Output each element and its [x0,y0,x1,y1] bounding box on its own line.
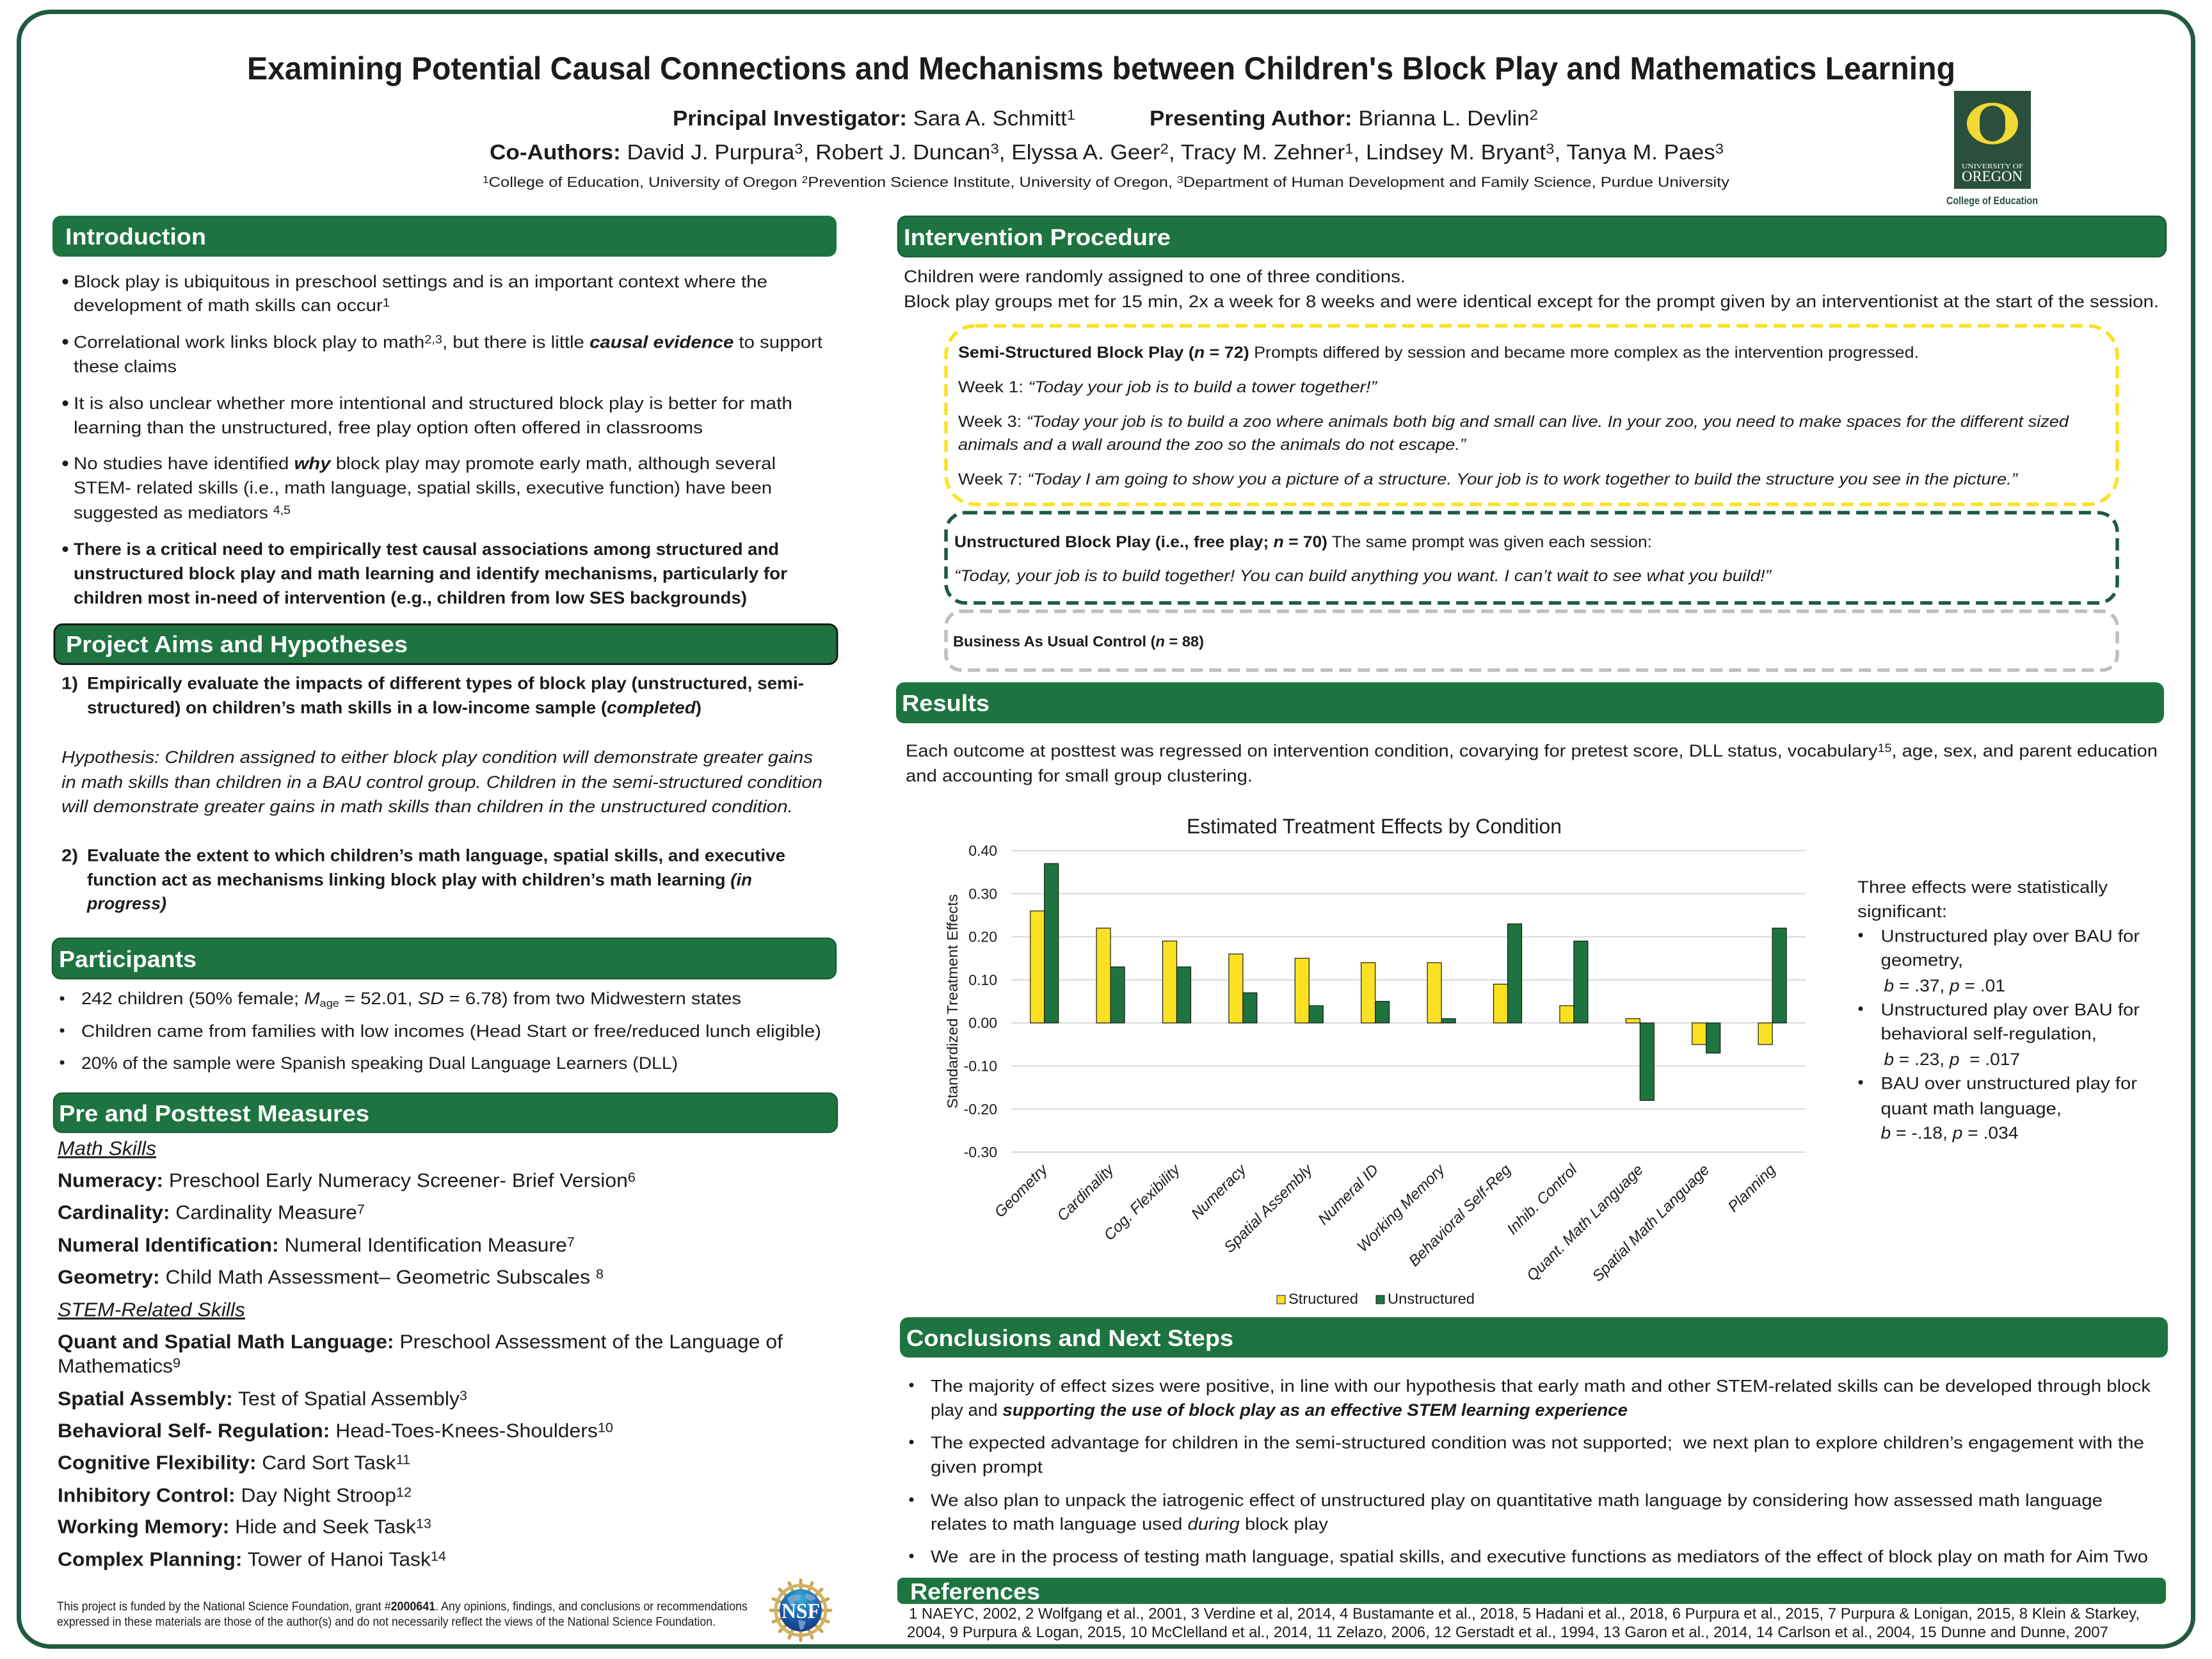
principal investigator: Principal Investigator: Sara A. Schmitt 1 [673,106,1075,130]
text block: significant effects: quant math language, [1880,1099,2062,1118]
text block: STEM-related skills measures: Working Memory: Hide and Seek Task 13 [58,1516,431,1537]
heading: introduction: Introduction [65,223,206,250]
panel: intervention procedure [898,216,2166,670]
text block: introduction bullets: development of math skills can occur 1 [74,296,390,315]
text block: introduction bullets: unstructured block play and math learning and identify mechanisms, particularly for [74,564,787,583]
text block: procedure summary: Children were randomly assigned to one of three conditions. [904,267,1406,286]
text block: participants bullets [60,989,821,1073]
y axis tick labels: 0.00 [968,1014,997,1031]
heading: results: Results [902,690,990,716]
panel: results [896,682,2164,1307]
text block: introduction bullets: Block play is ubiquitous in preschool settings and is an important context where the [74,272,767,291]
chart title: Estimated Treatment Effects by Condition [1187,815,1562,838]
text block: math skills measures: Numeral Identification: Numeral Identification Measure 7 [58,1234,575,1256]
funding statement: This project is funded by the National Science Foundation, grant #2000641. Any opinions, findings, and conclusions or recommendations [57,1600,748,1614]
text block: introduction bullets: It is also unclear whether more intentional and structured block play is better for math [74,394,792,413]
logo: University of Oregon: UNIVERSITY OF [1962,163,2023,170]
callout: semi-structured block play: Week 7: “Today I am going to show you a picture of a structure. Your job is to work together to build the structure you see in the picture.” [958,470,2019,488]
heading: project aims: Project Aims and Hypotheses [66,631,408,657]
text block: aim 2: progress) [86,894,166,913]
heading: introduction [52,216,837,257]
text block: aim 1: Empirically evaluate the impacts of different types of block play (unstructured, semi- [87,673,804,693]
text block: significant effects: b = .37, p = .01 [1884,976,2005,995]
text block: conclusions bullets: The expected advantage for children in the semi-structured condition was not supported; we next plan to explore children’s engagement with the [931,1433,2144,1452]
icon: NSF logo: NSF [781,1599,820,1623]
logo: University of Oregon: College of Education [1946,195,2038,207]
x axis category labels: Numeracy [1188,1160,1251,1223]
text block: STEM-related skills measures: Quant and Spatial Math Language: Preschool Assessment of the Language of [58,1330,783,1353]
bars: structured [1030,911,1772,1045]
x axis category labels: Inhib. Control [1503,1161,1581,1238]
text block: significant effects: b = .23, p = .017 [1884,1050,2020,1069]
text block: significant effects: significant: [1857,902,1947,921]
text block: significant effects: behavioral self-regulation, [1880,1024,2097,1043]
heading: project aims [54,625,837,664]
text block: STEM-related skills measures [58,1298,783,1571]
bars: unstructured [1045,863,1786,1100]
y axis tick labels: 0.40 [968,842,997,859]
text block: STEM-related skills measures: Spatial Assembly: Test of Spatial Assembly 3 [58,1388,467,1409]
affiliations: 1College of Education, University of Oregon 2Prevention Science Institute, University of Oregon, 3Department of Human Development and Family Science, Purdue University [483,174,1730,190]
callout: semi-structured block play: Week 3: “Today your job is to build a zoo where animals both big and small can live. In your zoo, you need to make spaces for the different sized [958,413,2069,431]
text block: significant effects: b = -.18, p = .034 [1880,1123,2019,1142]
legend: Structured [1288,1290,1358,1307]
x axis category labels: Spatial Math Language [1589,1161,1713,1285]
text block: introduction bullets: Correlational work links block play to math 2,3, but there is little causal evidence to support [74,333,823,352]
text block: participants bullets: 242 children (50% female; Mage = 52.01, SD = 6.78) from two Midwestern states [81,989,741,1009]
x axis category labels: Behavioral Self-Reg [1406,1161,1514,1270]
callout: unstructured block play: “Today, your job is to build together! You can build anything you want. I can’t wait to see what you build!” [954,567,1772,585]
text block: conclusions bullets: play and supporting the use of block play as an effective STEM learning experience [931,1400,1628,1420]
text block: introduction bullets [63,272,823,607]
heading: participants [52,938,836,979]
logo: University of Oregon: OREGON [1962,168,2023,184]
text block: STEM-related skills measures: Mathematics9 [58,1354,180,1377]
panel: conclusions and next steps [900,1317,2168,1566]
x axis category labels: Numeral ID [1315,1161,1382,1228]
text block: significant effects: Unstructured play over BAU for [1880,927,2140,946]
text block: aim 2: 2) [61,846,78,865]
text block: introduction bullets: suggested as mediators 4,5 [74,503,291,522]
y axis tick labels: -0.10 [964,1057,997,1074]
text block: STEM-related skills measures: Complex Planning: Tower of Hanoi Task 14 [58,1548,446,1571]
text block: references list [907,1605,2140,1641]
text block: introduction bullets: No studies have identified why block play may promote early math, although several [74,454,776,473]
title: Examining Potential Causal Connections and Mechanisms between Children's Block Play and Mathematics Learning [247,51,1955,86]
y axis tick labels: 0.30 [968,885,997,902]
text block: STEM-related skills measures: Cognitive Flexibility: Card Sort Task11 [58,1452,410,1473]
text block: introduction bullets: these claims [74,357,177,376]
callout: unstructured block play [946,513,2117,603]
text block: introduction bullets: children most in-need of intervention (e.g., children from low SES backgrounds) [74,588,747,607]
text block: aim 2 [61,846,785,913]
text block: aim 2: function act as mechanisms linking block play with children’s math learning (in [87,870,752,890]
callout: business as usual control [946,611,2117,670]
text block: references list: 2004, 9 Purpura & Logan, 2015, 10 McClelland et al., 2014, 11 Zelazo, 2006, 12 Gerstadt et al., 1994, 13 Garon et al., 2014, 14 Carlson et al., 2004, 15 Dunne and Dunne, 2007 [907,1624,2108,1641]
text block: analytic approach: Each outcome at posttest was regressed on intervention condition, covarying for pretest score, DLL status, vocabulary 15, age, sex, and parent education [906,741,2158,760]
heading: participants: Participants [59,946,196,972]
text block: significant effects: Unstructured play over BAU for [1880,1000,2140,1019]
x axis category labels: Planning [1724,1161,1779,1215]
text block: conclusions bullets: relates to math language used during block play [931,1514,1329,1534]
x axis category labels: Cardinality [1054,1160,1118,1224]
text block: aim 1: structured) on children’s math skills in a low-income sample ( completed) [87,698,701,717]
text block: hypothesis: in math skills than children in a BAU control group. Children in the semi-structured condition [61,773,822,792]
text block: aim 1 [61,673,804,717]
presenting author: Presenting Author: Brianna L. Devlin 2 [1150,106,1538,130]
heading: measures: Pre and Posttest Measures [59,1100,369,1126]
logo: University of Oregon [1946,91,2038,207]
text block: conclusions bullets: We are in the process of testing math language, spatial skills, and executive functions as mediators of the effect of block play on math for Aim Two [931,1547,2148,1566]
text block: math skills measures: Cardinality: Cardinality Measure 7 [58,1201,365,1224]
y axis tick labels [964,842,997,1160]
x axis category labels: Working Memory [1354,1160,1449,1255]
panel: participants [52,938,836,1073]
callout: semi-structured block play: Semi-Structured Block Play ( n = 72) Prompts differed by session and became more complex as the intervention progressed. [958,344,1919,362]
funding statement: expressed in these materials are those of the author(s) and do not necessarily reflect the views of the National Science Foundation. [57,1615,716,1629]
text block: significant effects: Three effects were statistically [1857,878,2108,897]
text block: math skills measures: Math Skills [58,1137,156,1160]
callout: semi-structured block play: Week 1: “Today your job is to build a tower together!” [958,378,1378,396]
callout: unstructured block play: Unstructured Block Play (i.e., free play; n = 70) The same prompt was given each session: [954,533,1652,551]
text block: analytic approach: and accounting for small group clustering. [906,766,1253,785]
text block: STEM-related skills measures: Behavioral Self- Regulation: Head-Toes-Knees-Shoulders 10 [58,1420,613,1441]
text block: math skills measures: Geometry: Child Math Assessment– Geometric Subscales 8 [58,1266,604,1288]
text block: introduction bullets: There is a critical need to empirically test causal associations among structured and [74,540,779,559]
callout: business as usual control: Business As Usual Control ( n = 88) [953,633,1204,650]
callout: semi-structured block play [946,326,2117,504]
text block: significant effects: BAU over unstructured play for [1880,1074,2137,1093]
poster header [247,51,2038,207]
y axis tick labels: -0.20 [964,1101,997,1118]
x axis category labels: Spatial Assembly [1221,1160,1317,1256]
heading: conclusions: Conclusions and Next Steps [906,1325,1233,1351]
text block: math skills measures: Numeracy: Preschool Early Numeracy Screener- Brief Version 6 [58,1169,636,1192]
x axis category labels [991,1160,1779,1285]
heading: references: References [910,1578,1040,1605]
text block: significant effects [1857,878,2140,1142]
text block: hypothesis: will demonstrate greater gains in math skills than children in the unstructured condition. [61,797,793,816]
text block: participants bullets: 20% of the sample were Spanish speaking Dual Language Learners (DLL) [81,1054,678,1073]
bar chart: estimated treatment effects [944,815,1806,1307]
text block: significant effects: geometry, [1880,950,1963,970]
text block: math skills measures [58,1137,636,1288]
heading: intervention procedure: Intervention Procedure [904,224,1171,250]
text block: conclusions bullets: given prompt [931,1457,1043,1477]
heading: results [896,682,2164,723]
text block: procedure summary: Block play groups met for 15 min, 2x a week for 8 weeks and were identical except for the prompt given by an interventionist at the start of the session. [904,292,2159,311]
callout: semi-structured block play: animals and a wall around the zoo so the animals do not escape.” [958,436,1467,454]
co-authors: Co-Authors: David J. Purpura 3, Robert J. Duncan 3, Elyssa A. Geer 2, Tracy M. Zehner 1, Lindsey M. Bryant 3, Tanya M. Paes 3 [490,140,1724,164]
text block: conclusions bullets: We also plan to unpack the iatrogenic effect of unstructured play on quantitative math language by considering how assessed math language [931,1491,2103,1510]
funding statement [57,1600,748,1629]
text block: aim 1: 1) [61,673,78,693]
panel: references [897,1578,2166,1641]
panel: project aims and hypotheses [54,625,837,913]
panel: introduction [52,216,837,607]
x axis category labels: Geometry [991,1160,1052,1221]
heading: conclusions [900,1317,2168,1358]
text block: conclusions bullets: The majority of effect sizes were positive, in line with our hypothesis that early math and other STEM-related skills can be developed through block [931,1376,2151,1395]
y axis tick labels: -0.30 [964,1144,997,1160]
text block: references list: 1 NAEYC, 2002, 2 Wolfgang et al., 2001, 3 Verdine et al, 2014, 4 Bustamante et al., 2018, 5 Hadani et al., 2018, 6 Purpura et al., 2015, 7 Purpura & Lonigan, 2015, 8 Klein & Starkey, [909,1605,2140,1623]
icon: NSF logo [771,1580,831,1640]
text block: hypothesis: Hypothesis: Children assigned to either block play condition will demonstrate greater gains [61,748,813,767]
text block: STEM-related skills measures: STEM-Related Skills [58,1298,245,1321]
text block: STEM-related skills measures: Inhibitory Control: Day Night Stroop 12 [58,1484,412,1507]
text block: participants bullets: Children came from families with low incomes (Head Start or free/reduced lunch eligible) [81,1022,821,1041]
x axis category labels: Quant. Math Language [1523,1161,1647,1285]
heading: references [897,1578,2166,1605]
x axis category labels: Cog. Flexibility [1101,1160,1184,1244]
y axis title: Standardized Treatment Effects [944,894,961,1109]
legend: Unstructured [1388,1290,1475,1307]
text block: procedure summary [904,267,2159,311]
y axis tick labels: 0.10 [968,972,997,988]
text block: analytic approach [906,741,2158,785]
text block: introduction bullets: learning than the unstructured, free play option often offered in classrooms [74,418,703,437]
heading: measures [54,1093,837,1132]
panel: pre and posttest measures [54,1093,837,1571]
y axis tick labels: 0.20 [968,929,997,945]
legend [1277,1290,1475,1307]
heading: intervention procedure [898,216,2166,257]
text block: conclusions bullets [909,1376,2151,1566]
text block: introduction bullets: STEM- related skills (i.e., math language, spatial skills, executive function) have been [74,478,772,497]
text block: hypothesis [61,748,822,816]
text block: aim 2: Evaluate the extent to which children’s math language, spatial skills, and executive [87,846,785,865]
